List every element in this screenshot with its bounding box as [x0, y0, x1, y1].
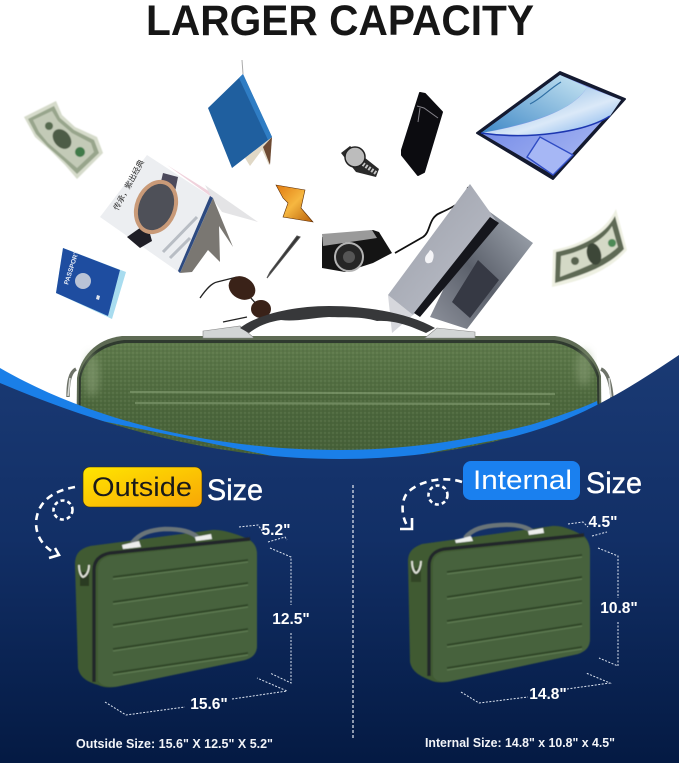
strap rings [68, 369, 612, 398]
icon: gold block [276, 185, 313, 222]
dimension labels: 5.2" [262, 522, 290, 539]
internal caption: Internal Size: 14.8" x 10.8" x 4.5" [425, 736, 615, 750]
size heading: Size [207, 474, 263, 507]
icon: dashed turn arrow [400, 479, 462, 529]
icon: black pouch [402, 93, 442, 175]
handle [240, 306, 435, 333]
outside badge: Outside [92, 472, 192, 502]
curved band [0, 368, 600, 470]
floating items [24, 60, 627, 333]
icon: tablet [477, 72, 625, 179]
internal badge: Internal [473, 465, 572, 495]
icon: sunglasses [200, 271, 271, 322]
clasps [203, 326, 253, 338]
suitcase [408, 525, 590, 682]
icon: blue notebook [208, 60, 272, 168]
dimension labels [190, 522, 310, 713]
icon: watch magazine [100, 155, 258, 273]
size heading: Size [586, 467, 642, 500]
icon: wristwatch [341, 146, 379, 177]
icon: camera [322, 230, 392, 272]
panel: outside size [36, 467, 310, 751]
icon: passport [56, 248, 126, 319]
dimension lines [105, 525, 291, 715]
suitcase [75, 529, 257, 687]
hero case [68, 306, 612, 470]
dimension labels: 4.5" [589, 514, 617, 531]
panel: internal size [400, 461, 642, 750]
icon: pen [267, 236, 300, 278]
internal badge [463, 461, 580, 500]
dimension labels [529, 514, 638, 703]
outside caption: Outside Size: 15.6" X 12.5" X 5.2" [76, 737, 273, 751]
icon: dashed turn arrow [36, 487, 75, 558]
icon: passport: PASSPORT [63, 250, 81, 286]
icon: watch magazine: 传承，紫出经典 [111, 158, 146, 212]
dimension labels: 10.8" [600, 600, 638, 617]
dimension lines [461, 522, 618, 703]
dimension labels: 12.5" [272, 611, 310, 628]
dimension labels: 14.8" [529, 686, 567, 703]
dimension labels: 15.6" [190, 696, 228, 713]
icon: two dollar bill [552, 209, 627, 287]
icon: dollar bill left [24, 101, 103, 179]
icon: laptop [388, 184, 533, 333]
divider [352, 485, 354, 740]
navy panel [0, 355, 679, 763]
outside badge [83, 467, 202, 507]
case body [76, 336, 602, 470]
